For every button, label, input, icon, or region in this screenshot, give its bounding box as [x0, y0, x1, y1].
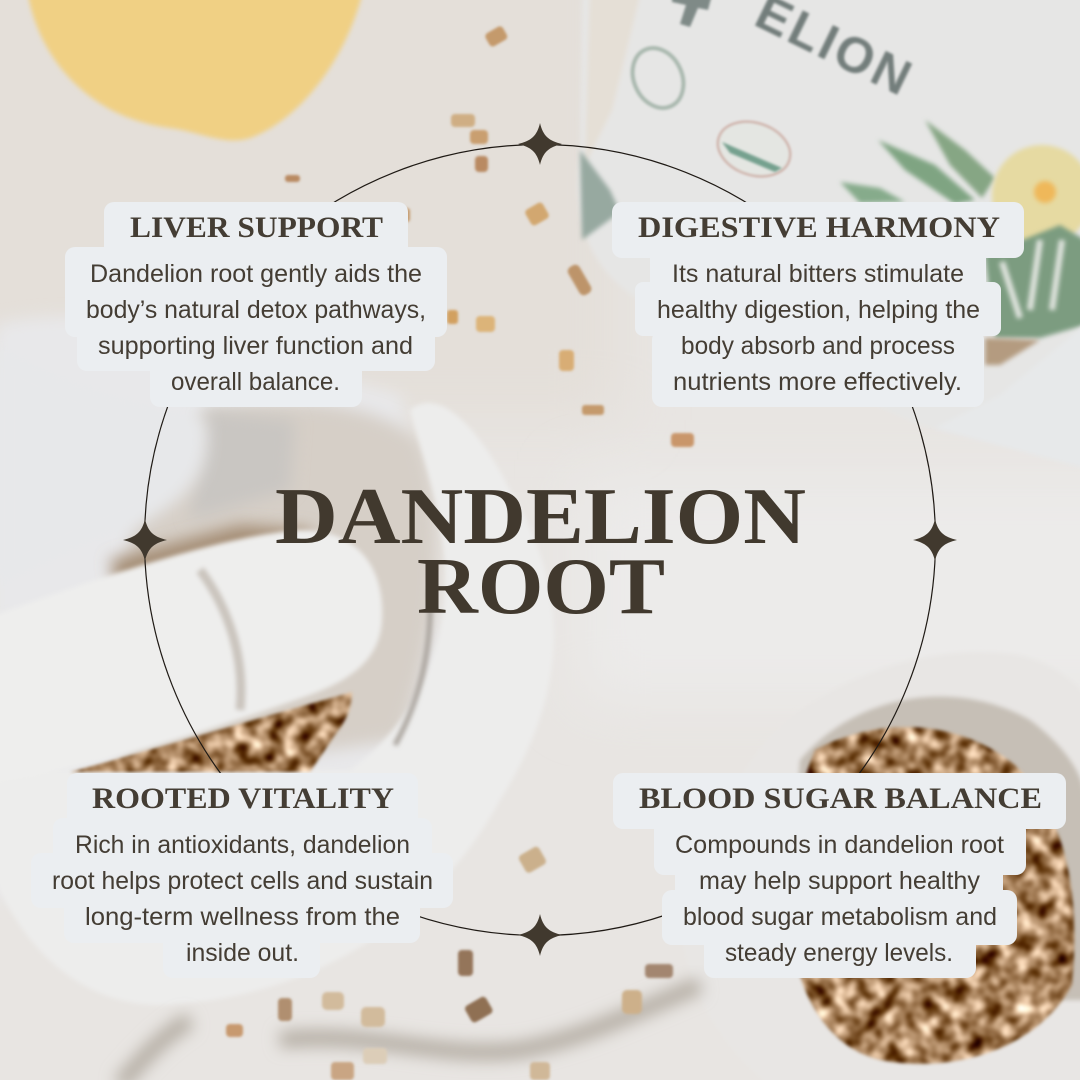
title: Dandelion Root: ROOT [417, 543, 665, 631]
text block [52, 831, 433, 967]
title: Dandelion Root: DANDELION [275, 473, 806, 561]
text block: Dandelion root gently aids the [90, 260, 422, 288]
panel: blood sugar balance [613, 773, 1066, 978]
text block [86, 260, 426, 396]
text block: blood sugar metabolism and [683, 903, 997, 931]
scattered root chips [226, 25, 694, 1080]
icon: top star [518, 123, 562, 165]
marble vein [120, 985, 700, 1080]
text block: Its natural bitters stimulate [672, 260, 964, 288]
text block: supporting liver function and [98, 332, 413, 360]
text block [657, 260, 980, 396]
icon: left star [123, 519, 167, 561]
text block: nutrients more effectively. [673, 368, 962, 396]
heading: ROOTED VITALITY [92, 782, 394, 815]
panel: liver support [65, 202, 447, 407]
product bottle and label [578, 0, 1080, 468]
text block: body’s natural detox pathways, [86, 296, 426, 324]
left mortar and pestle [0, 317, 554, 1005]
heading: DIGESTIVE HARMONY [638, 211, 1000, 244]
text block: healthy digestion, helping the [657, 296, 980, 324]
heading: BLOOD SUGAR BALANCE [639, 782, 1042, 815]
panel: rooted vitality [31, 773, 453, 978]
panel: digestive harmony [612, 202, 1024, 407]
icon: bottom star [518, 914, 562, 956]
text block: Rich in antioxidants, dandelion [75, 831, 410, 859]
right bowl of herbs [678, 652, 1080, 1080]
text block: inside out. [186, 939, 299, 967]
text block: Compounds in dandelion root [675, 831, 1004, 859]
text block: root helps protect cells and sustain [52, 867, 433, 895]
text block: may help support healthy [699, 867, 980, 895]
decorative ring with four stars [123, 123, 957, 956]
title: Dandelion Root [275, 473, 806, 631]
text block: overall balance. [171, 368, 340, 396]
lemon [28, 0, 362, 140]
text block: long-term wellness from the [85, 903, 400, 931]
heading: LIVER SUPPORT [130, 211, 383, 244]
text block [675, 831, 1004, 967]
text block: steady energy levels. [725, 939, 953, 967]
text block: body absorb and process [681, 332, 955, 360]
icon: right star [913, 519, 957, 561]
